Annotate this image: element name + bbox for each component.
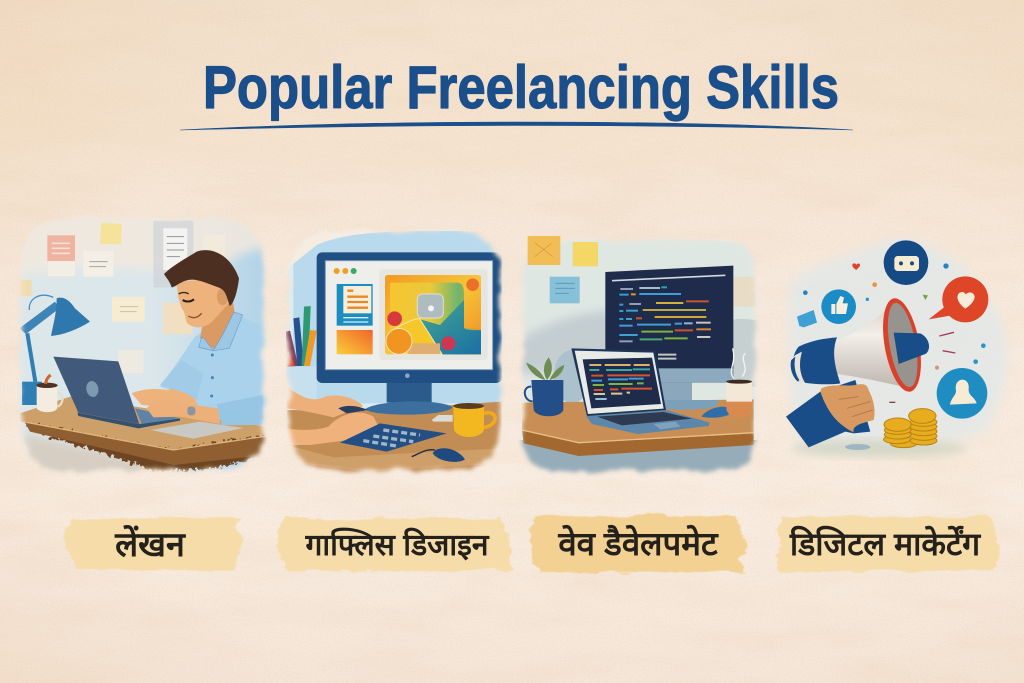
icon: robot chat xyxy=(884,240,928,285)
small disc on ground xyxy=(845,444,870,450)
keyboard xyxy=(340,423,447,452)
laptop xyxy=(53,357,180,428)
hand holding megaphone xyxy=(786,380,875,447)
ui card xyxy=(337,284,373,326)
icon: heart bubble xyxy=(929,276,988,322)
wall background xyxy=(520,239,758,440)
laptop lid xyxy=(571,348,666,416)
window dots xyxy=(334,268,357,274)
man shirt xyxy=(160,317,262,420)
hands xyxy=(287,387,381,445)
wall background xyxy=(18,222,268,474)
laptop trackpad xyxy=(654,422,680,429)
yellow mug xyxy=(453,403,495,437)
man hair xyxy=(164,250,239,306)
label: writing xyxy=(63,518,243,570)
text: डिजिटल माकेर्टेंग xyxy=(789,525,981,562)
monitor stand xyxy=(365,383,453,415)
man shirt collar xyxy=(199,312,243,351)
blue plant shadow xyxy=(554,350,590,403)
banner xyxy=(776,517,1000,572)
top fade xyxy=(567,238,732,242)
banner xyxy=(63,518,243,570)
desk lamp xyxy=(19,295,90,405)
gold coins xyxy=(884,409,937,448)
hills right xyxy=(732,319,765,387)
pale background blob xyxy=(788,239,1007,449)
panel: web development illustration xyxy=(518,236,758,476)
pencil cup xyxy=(286,306,317,400)
blue wash xyxy=(293,231,507,403)
wall top fade xyxy=(20,214,263,274)
banner xyxy=(530,516,747,572)
man neck xyxy=(200,302,234,350)
ground shadow xyxy=(790,440,967,457)
man arm and hands xyxy=(132,360,263,425)
monitor xyxy=(317,252,502,383)
title underline xyxy=(180,122,853,130)
coffee mug xyxy=(36,375,62,412)
man head xyxy=(177,278,232,327)
sticky notes xyxy=(528,236,598,303)
panel: digital marketing illustration xyxy=(786,239,1007,457)
desk lower band xyxy=(294,448,494,471)
title: Popular Freelancing Skills xyxy=(203,54,839,121)
text: गाफ्लिस डिजाइन xyxy=(304,527,490,562)
label: web development xyxy=(530,516,747,572)
desk front shade xyxy=(512,440,765,480)
desk xyxy=(522,399,754,456)
sticky notes on wall xyxy=(18,221,225,373)
artwork panel xyxy=(379,269,488,360)
ui swatch xyxy=(337,330,373,354)
laptop xyxy=(571,348,710,434)
cream wash xyxy=(287,228,464,274)
paper on desk xyxy=(432,415,453,422)
wall background xyxy=(286,230,459,410)
wall note right xyxy=(732,277,755,307)
panel: writing illustration xyxy=(18,216,268,474)
text: लेंखन xyxy=(114,524,186,564)
mouse xyxy=(412,448,465,462)
laptop keyboard xyxy=(597,412,692,425)
laptop base xyxy=(586,410,710,434)
desk lower speckle xyxy=(24,432,165,474)
panel: graphic design illustration xyxy=(280,220,510,480)
icon: folder xyxy=(797,310,817,327)
potted plant xyxy=(525,357,564,416)
label: digital marketing xyxy=(776,517,1000,572)
code lines xyxy=(619,287,711,359)
icon: profile xyxy=(937,368,987,419)
megaphone xyxy=(791,295,929,395)
shirt buttons xyxy=(210,354,214,398)
coffee cup with steam xyxy=(726,348,752,418)
banner xyxy=(276,518,512,571)
text: वेव डैवेलपमेट xyxy=(557,524,719,562)
desk xyxy=(20,397,267,472)
computer mouse xyxy=(701,407,729,418)
icon: thumbs up xyxy=(821,289,856,324)
decorative confetti xyxy=(803,263,986,402)
desk xyxy=(287,402,502,477)
label: graphic design xyxy=(276,518,512,571)
notebook on desk xyxy=(151,422,243,439)
grey hills xyxy=(521,308,606,376)
desktop monitor xyxy=(605,266,733,410)
